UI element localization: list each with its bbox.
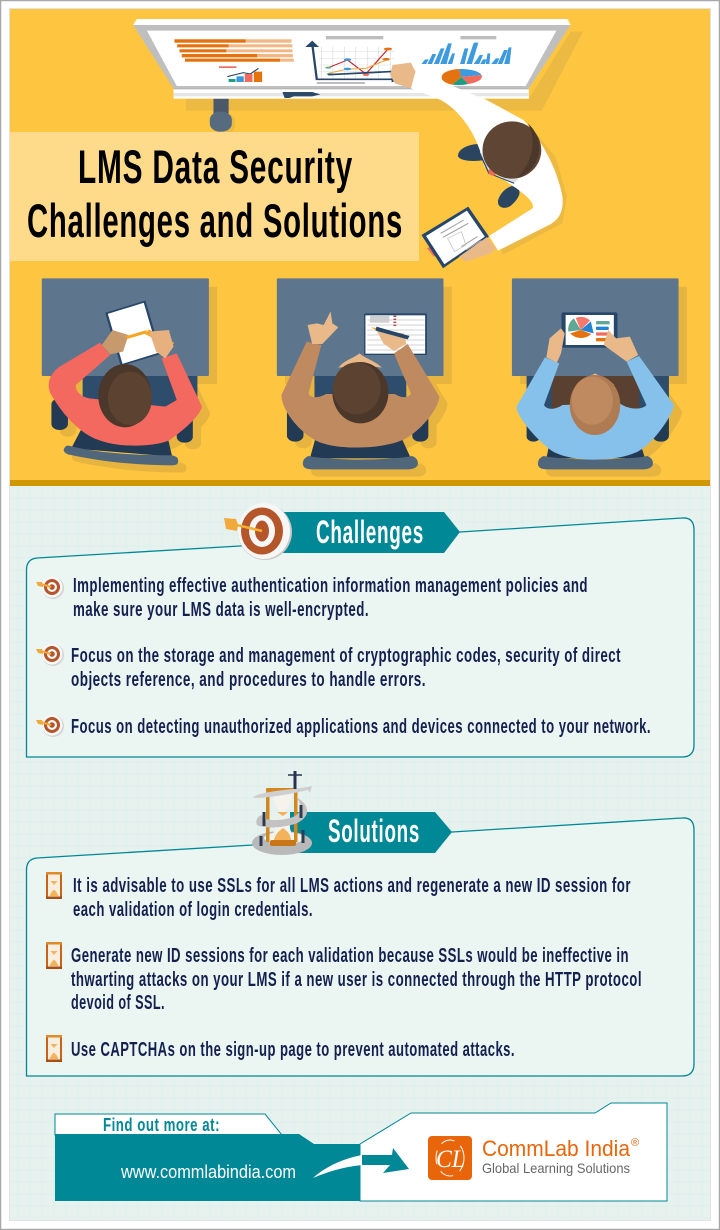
icon: target bullet [36, 644, 64, 666]
title box [10, 132, 419, 261]
chart: line graph [305, 36, 398, 84]
title text: Challenges and Solutions [27, 194, 403, 247]
whiteboard stand [210, 99, 235, 133]
chart: small trend bars [219, 66, 262, 82]
solution 3 [46, 1035, 515, 1062]
presenter shadow [498, 123, 567, 255]
header bottom band [10, 480, 710, 486]
title text [27, 140, 403, 247]
footer: find out more: www.commlabindia.com [120, 1162, 296, 1182]
person 2 at desk [277, 278, 452, 477]
icon: hourglass bullet [46, 1035, 62, 1062]
footer: find out more [55, 1114, 362, 1201]
challenge 1 text [73, 575, 588, 621]
person 1 at desk [42, 278, 217, 473]
challenge 2 [36, 644, 621, 691]
icon: target bullet [36, 714, 64, 737]
challenges banner [280, 512, 460, 553]
challenge 1 [36, 575, 588, 621]
icon: hourglass bullet [46, 872, 62, 899]
solution 1 text [73, 875, 631, 921]
chart: horizontal bars [174, 39, 294, 62]
challenge 2 text [71, 645, 621, 691]
solution 2 text: devoid of SSL. [71, 992, 165, 1014]
whiteboard shadow [186, 32, 583, 111]
textured lower background [10, 486, 710, 1220]
challenge 2 text: objects reference, and procedures to handle errors. [71, 669, 426, 691]
presenter clipboard [421, 207, 496, 268]
chart: blue bars and pie [421, 36, 511, 85]
footer: logo panel [360, 1103, 667, 1201]
icon: target with dart [224, 503, 292, 560]
panel: challenges [26, 503, 694, 757]
presenter coat [411, 71, 563, 251]
solution 2 [46, 942, 642, 1014]
challenge 1 text: make sure your LMS data is well-encrypted. [73, 599, 369, 621]
icon: hourglass bullet [46, 942, 62, 969]
title text: LMS Data Security [78, 140, 353, 193]
logo mark [428, 1136, 472, 1180]
illustration: whiteboard and presenter [133, 19, 583, 268]
solution 1 [46, 872, 631, 921]
solutions banner [290, 812, 452, 853]
illustration: three seated people [42, 278, 687, 477]
header scene background [10, 9, 710, 480]
footer: find out more: Find out more at: [103, 1115, 220, 1135]
person 3 at desk [512, 278, 687, 477]
logo wordmark: CommLab India [482, 1136, 631, 1161]
solution 2 text [71, 945, 642, 1014]
presenter head [480, 121, 541, 183]
challenge 3 [36, 714, 651, 738]
arrow to logo [313, 1148, 409, 1178]
presenter shoes [458, 144, 520, 208]
presenter right hand [390, 63, 415, 88]
whiteboard [133, 19, 571, 99]
logo wordmark: ® [631, 1137, 639, 1149]
logo mark: CL [436, 1146, 465, 1173]
challenges banner: Challenges [316, 514, 424, 550]
solution 1 text: each validation of login credentials. [73, 899, 313, 921]
icon: target bullet [36, 576, 64, 599]
logo wordmark: Global Learning Solutions [482, 1160, 630, 1176]
panel: solutions [26, 771, 694, 1076]
icon: hourglass with figures [252, 771, 312, 855]
logo wordmark [482, 1136, 639, 1176]
solutions banner: Solutions [328, 813, 420, 849]
